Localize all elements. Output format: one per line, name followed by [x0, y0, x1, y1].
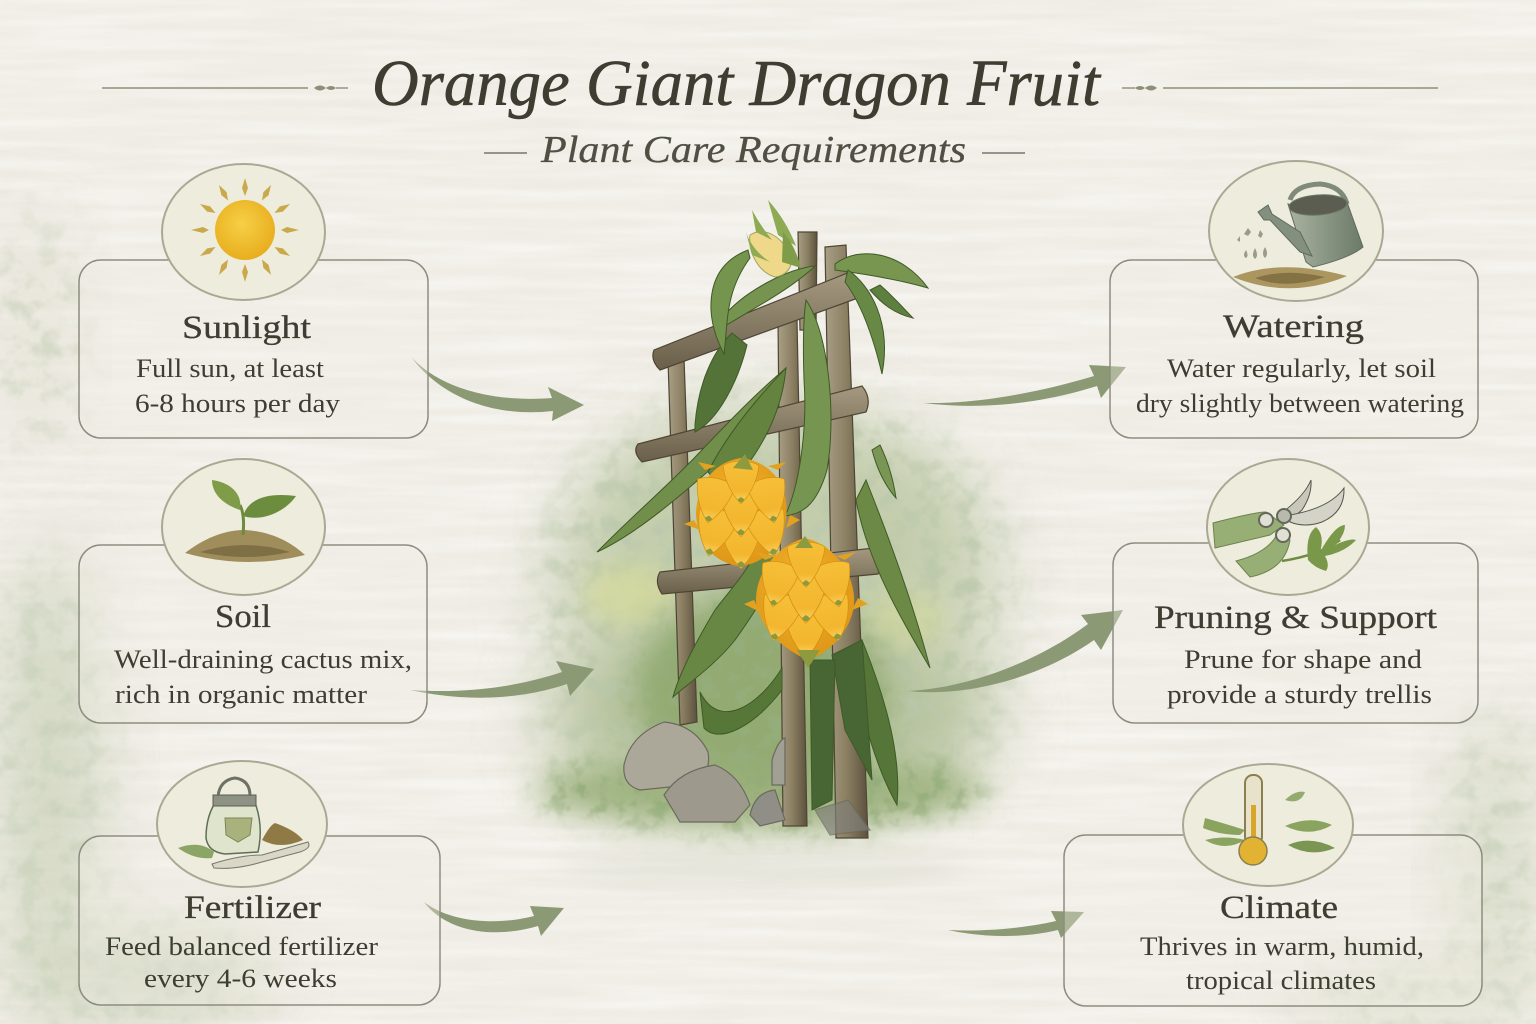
heading: Watering: [1223, 309, 1364, 345]
body text: provide a sturdy trellis: [1167, 680, 1432, 709]
title ornament: right: [1122, 86, 1438, 90]
background foliage: [535, 410, 1000, 888]
arrow: soil to plant: [410, 661, 594, 698]
arrow: sunlight to plant: [412, 358, 584, 421]
fruit: lower: [744, 536, 868, 668]
rocks: [624, 722, 870, 835]
body text: tropical climates: [1186, 966, 1376, 995]
icon: thermometer and leaves: [1183, 764, 1353, 886]
heading: Soil: [215, 599, 271, 635]
body text: [1136, 354, 1464, 418]
panel: pruning and support: [1113, 459, 1478, 723]
body text: dry slightly between watering: [1136, 389, 1464, 418]
panel: watering: [1110, 161, 1478, 438]
arrow: fertilizer to plant: [424, 902, 564, 936]
body text: Full sun, at least: [136, 354, 325, 383]
body text: Water regularly, let soil: [1167, 354, 1436, 383]
icon: watering can: [1209, 161, 1383, 301]
body text: [135, 354, 340, 418]
body text: [1140, 932, 1424, 995]
body text: every 4-6 weeks: [144, 964, 337, 993]
arrow: plant to climate: [948, 911, 1084, 938]
title: Orange Giant Dragon Fruit: [372, 47, 1102, 120]
heading: Climate: [1220, 890, 1338, 926]
panel: sunlight: [79, 164, 428, 438]
panel: climate: [1064, 764, 1482, 1006]
central illustration: dragon fruit plant on trellis: [535, 200, 1000, 888]
flower bud: [746, 200, 801, 277]
body text: Thrives in warm, humid,: [1140, 932, 1424, 961]
arrow: plant to pruning: [908, 610, 1123, 692]
title ornament: left: [102, 86, 348, 90]
heading: Pruning & Support: [1154, 600, 1437, 636]
subtitle: Plant Care Requirements: [540, 129, 966, 171]
panel: soil: [79, 459, 427, 723]
trellis posts: [668, 232, 868, 838]
body text: Well-draining cactus mix,: [114, 645, 412, 674]
icon: pruning shears and herb sprig: [1207, 459, 1369, 595]
heading: Fertilizer: [184, 890, 321, 926]
body text: [114, 645, 412, 709]
body text: [1167, 645, 1432, 709]
cactus stems: [597, 250, 930, 810]
watercolor wash: corners: [0, 210, 1533, 1020]
body text: Prune for shape and: [1184, 645, 1422, 674]
icon: sun: [162, 164, 325, 300]
body text: Feed balanced fertilizer: [105, 932, 378, 961]
heading: Sunlight: [182, 310, 311, 346]
panel: fertilizer: [79, 761, 440, 1005]
arrow: plant to watering: [924, 365, 1126, 406]
icon: seedling in soil: [162, 459, 325, 595]
body text: rich in organic matter: [115, 680, 367, 709]
body text: [105, 932, 378, 993]
body text: 6-8 hours per day: [135, 389, 340, 418]
icon: fertilizer bag and scoop: [157, 761, 327, 887]
fruit: upper: [684, 454, 800, 569]
trellis crossbars: [636, 272, 880, 594]
